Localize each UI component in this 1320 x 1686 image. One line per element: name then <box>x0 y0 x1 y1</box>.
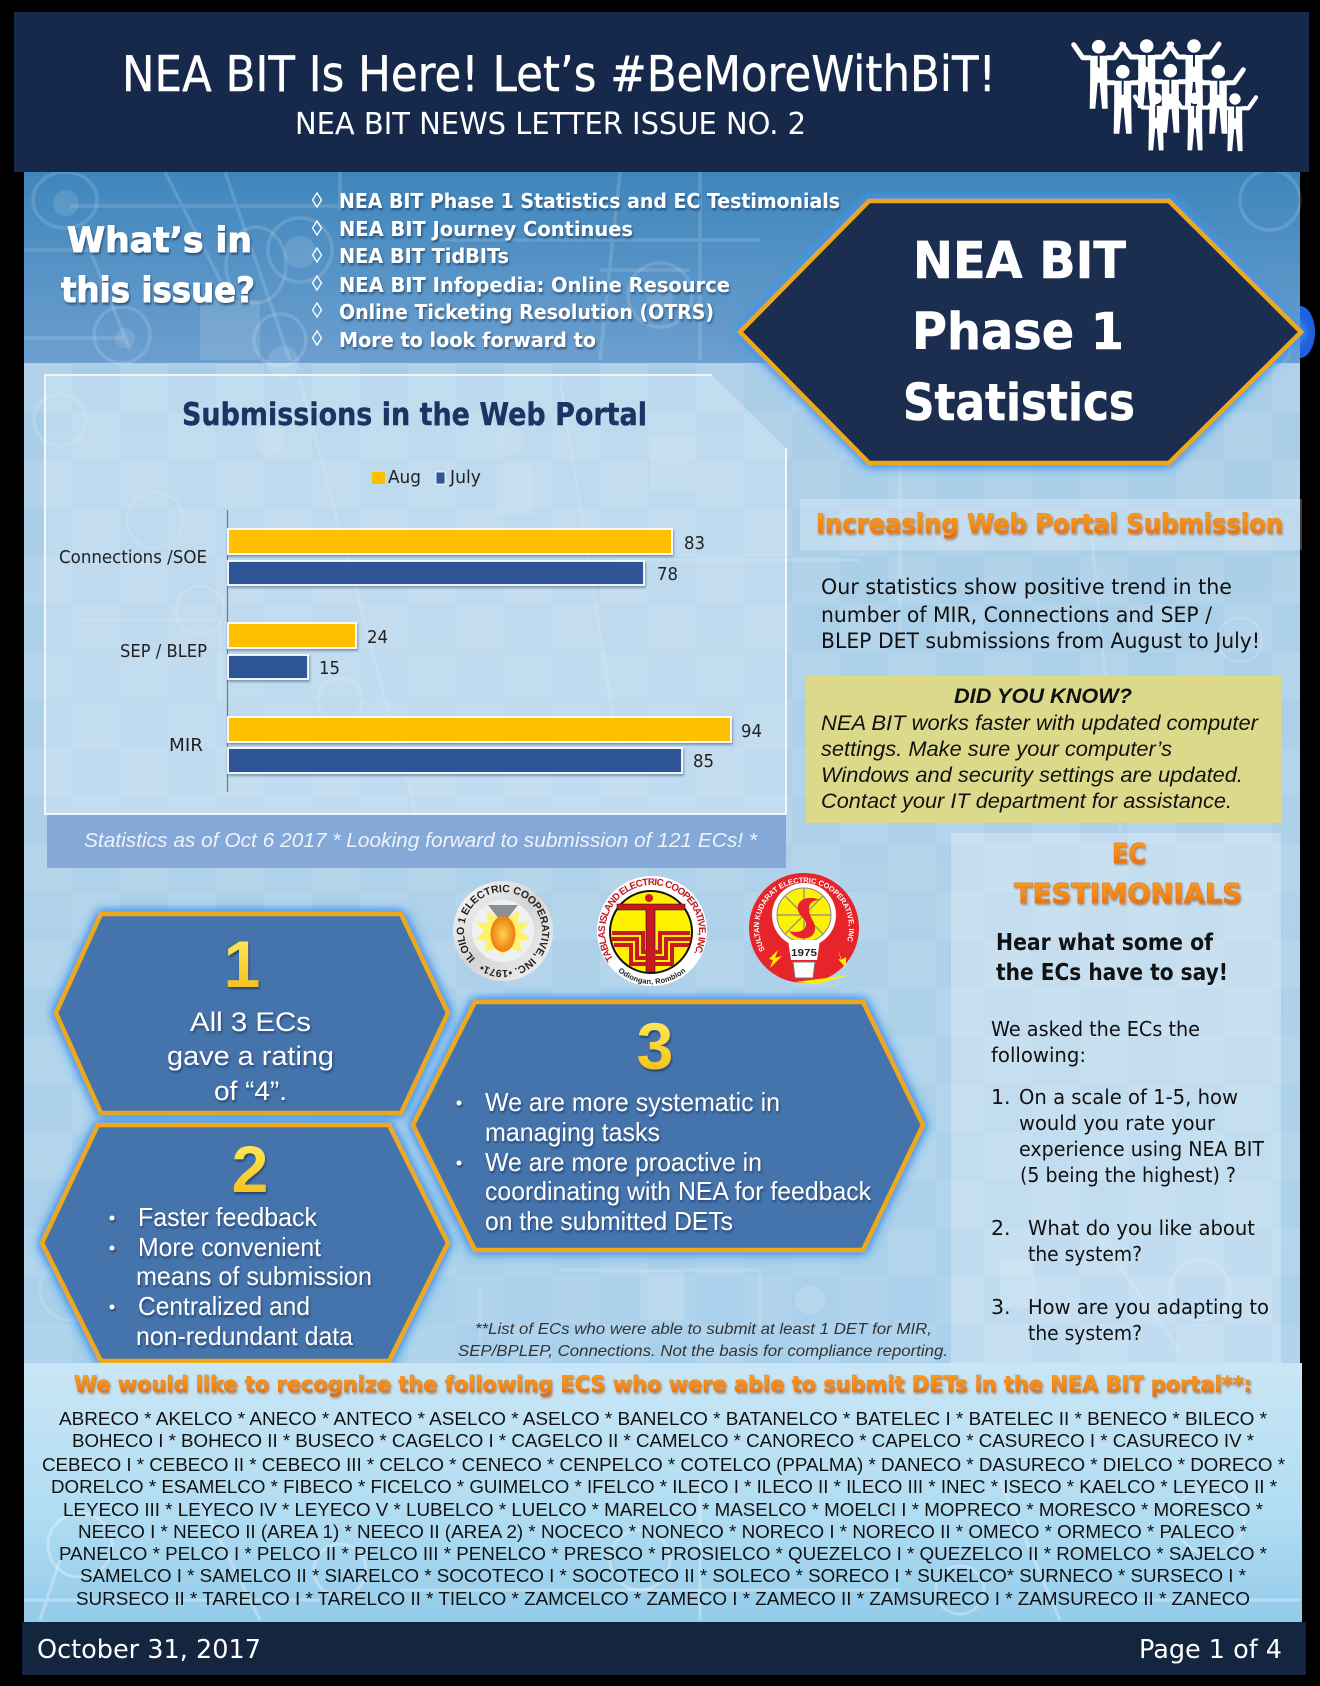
header banner <box>14 12 1309 172</box>
rating text: All 3 ECs <box>190 1007 311 1037</box>
EC names: SAMELCO I * SAMELCO II * SIARELCO * SOCOTECO I * SOCOTECO II * SOLECO * SORECO I * SUKELCO* SURNECO * SURSECO I * <box>80 1565 1246 1586</box>
testimonial questions: 3. <box>991 1295 1011 1319</box>
heading: What's in this issue: What’s in <box>67 221 252 261</box>
bar chart <box>59 510 762 792</box>
bar chart: 85 <box>693 751 714 772</box>
panel: answer 3 <box>413 1002 923 1250</box>
bar chart: Connections /SOE <box>59 547 207 568</box>
testimonials intro: Hear what some of <box>996 930 1214 956</box>
testimonial questions: would you rate your <box>1019 1111 1216 1135</box>
EC names: PANELCO * PELCO I * PELCO II * PELCO III * PENELCO * PRESCO * PROSIELCO * QUEZELCO I * QUEZELCO II * ROMELCO * SAJELCO * <box>59 1543 1267 1564</box>
chart legend <box>372 467 481 488</box>
issue contents list: More to look forward to <box>339 328 596 352</box>
rating text: gave a rating <box>167 1041 334 1071</box>
text: statistics summary: Our statistics show positive trend in the <box>821 575 1232 599</box>
icon: group of people <box>1074 39 1256 151</box>
likes list: More convenient <box>138 1232 322 1262</box>
issue contents list: NEA BIT TidBITs <box>339 244 509 268</box>
logo: Tablas Island Electric Cooperative: TABLAS ISLAND ELECTRIC COOPERATIVE, INC. <box>598 878 706 963</box>
adapting list: We are more systematic in <box>485 1087 780 1117</box>
badge: NEA BIT Phase 1 Statistics: Statistics <box>903 374 1135 433</box>
testimonial questions: experience using NEA BIT <box>1019 1137 1264 1161</box>
recognition heading: We would like to recognize the following ECS who were able to submit DETs in the NEA BIT portal**: <box>74 1373 1252 1398</box>
heading: increasing web portal submission <box>800 499 1302 550</box>
testimonial questions: What do you like about <box>1028 1216 1255 1240</box>
text: statistics summary <box>821 575 1260 653</box>
header subtitle: NEA BIT NEWS LETTER ISSUE NO. 2 <box>295 107 806 142</box>
EC names: ABRECO * AKELCO * ANECO * ANTECO * ASELCO * ASELCO * BANELCO * BATANELCO * BATELEC I * BATELEC II * BENECO * BILECO * <box>59 1408 1267 1429</box>
testimonial questions: How are you adapting to <box>1028 1295 1269 1319</box>
header title: NEA BIT Is Here! Let’s #BeMoreWithBiT! <box>122 46 996 103</box>
bar chart: 15 <box>319 658 340 679</box>
number 3: 3 <box>637 1009 673 1083</box>
footer bar <box>22 1622 1306 1675</box>
testimonial questions: 2. <box>991 1216 1011 1240</box>
likes list: Faster feedback <box>138 1202 318 1232</box>
logo: Sultan Kudarat Electric Cooperative: 1975 <box>791 948 818 959</box>
adapting list: managing tasks <box>485 1117 660 1147</box>
issue contents list <box>312 189 840 352</box>
chart title: Submissions in the Web Portal <box>182 397 647 433</box>
callout: did you know: DID YOU KNOW? <box>954 685 1132 708</box>
rating text <box>167 1007 334 1106</box>
footer page number: Page 1 of 4 <box>1139 1635 1282 1665</box>
issue contents list: NEA BIT Phase 1 Statistics and EC Testimonials <box>339 189 840 213</box>
text: statistics summary: BLEP DET submissions from August to July! <box>821 629 1260 653</box>
testimonials intro <box>996 930 1228 986</box>
footnote: SEP/BPLEP, Connections. Not the basis for compliance reporting. <box>458 1343 948 1360</box>
chart legend: Aug <box>388 467 421 488</box>
footer date: October 31, 2017 <box>37 1635 261 1665</box>
EC names: SURSECO II * TARELCO I * TARELCO II * TIELCO * ZAMCELCO * ZAMECO I * ZAMECO II * ZAMSURECO I * ZAMSURECO II * ZANECO <box>76 1588 1250 1609</box>
number 2: 2 <box>232 1132 268 1206</box>
EC names <box>42 1408 1285 1609</box>
text: statistics summary: number of MIR, Connections and SEP / <box>821 603 1213 627</box>
logo: Tablas Island Electric Cooperative: Odiongan, Romblon <box>619 968 686 986</box>
chart caption <box>47 815 786 868</box>
bar chart: 78 <box>657 564 678 585</box>
heading: What's in this issue <box>61 221 255 311</box>
bar chart: 24 <box>367 627 388 648</box>
footnote: **List of ECs who were able to submit at least 1 DET for MIR, <box>475 1321 932 1338</box>
issue contents list: Online Ticketing Resolution (OTRS) <box>339 300 714 324</box>
adapting list: We are more proactive in <box>485 1147 762 1177</box>
testimonial questions: We asked the ECs the <box>991 1017 1200 1041</box>
panel: EC testimonials <box>951 833 1281 1363</box>
testimonial questions: the system? <box>1028 1321 1142 1345</box>
heading: What's in this issue: this issue? <box>61 271 255 311</box>
number 1: 1 <box>224 927 260 1001</box>
callout: did you know <box>806 676 1281 823</box>
panel: submissions chart <box>45 375 786 814</box>
likes list: non-redundant data <box>136 1321 354 1351</box>
EC names: BOHECO I * BOHECO II * BUSECO * CAGELCO I * CAGELCO II * CAMELCO * CANORECO * CAPELCO * CASURECO I * CASURECO IV * <box>72 1430 1254 1451</box>
bar chart: MIR <box>169 735 203 756</box>
callout: did you know: settings. Make sure your computer’s <box>821 738 1173 761</box>
panel: answer 1 <box>56 914 448 1113</box>
adapting list: on the submitted DETs <box>485 1206 733 1236</box>
EC names: CEBECO I * CEBECO II * CEBECO III * CELCO * CENECO * CENPELCO * COTELCO (PPALMA) * DANECO * DASURECO * DIELCO * DORECO * <box>42 1454 1285 1475</box>
logo: Iloilo 1 Electric Cooperative: ILOILO 1 ELECTRIC COOPERATIVE, INC. •1971• <box>456 884 550 978</box>
badge: NEA BIT Phase 1 Statistics: Phase 1 <box>912 303 1124 362</box>
adapting list: coordinating with NEA for feedback <box>485 1176 872 1206</box>
callout: did you know: Contact your IT department for assistance. <box>821 790 1232 813</box>
panel: answer 2 <box>42 1125 448 1361</box>
chart legend: July <box>449 467 481 488</box>
footnote <box>458 1321 948 1360</box>
top band <box>24 170 1300 378</box>
panel: EC recognition list <box>24 1363 1302 1622</box>
callout: did you know: NEA BIT works faster with updated computer <box>821 712 1259 735</box>
likes list: means of submission <box>136 1261 372 1291</box>
testimonial questions: the system? <box>1028 1242 1142 1266</box>
bar chart: 94 <box>741 721 762 742</box>
likes list <box>110 1202 372 1351</box>
testimonials intro: the ECs have to say! <box>996 960 1228 986</box>
adapting list <box>456 1087 872 1236</box>
issue contents list: NEA BIT Infopedia: Online Resource <box>339 273 730 297</box>
rating text: of “4”. <box>214 1076 287 1106</box>
likes list: Centralized and <box>138 1291 310 1321</box>
chart caption: Statistics as of Oct 6 2017 * Looking forward to submission of 121 ECs! * <box>84 830 758 852</box>
badge: NEA BIT Phase 1 Statistics <box>740 201 1315 463</box>
bar chart: SEP / BLEP <box>120 641 207 662</box>
logo: Sultan Kudarat Electric Cooperative: SULTAN KUDARAT ELECTRIC COOPERATIVE, INC <box>754 877 854 952</box>
EC names: LEYECO III * LEYECO IV * LEYECO V * LUBELCO * LUELCO * MARELCO * MASELCO * MOELCI I * MOPRECO * MORESCO * MORESCO * <box>63 1499 1263 1520</box>
badge: NEA BIT Phase 1 Statistics: NEA BIT <box>913 232 1126 291</box>
issue contents list: NEA BIT Journey Continues <box>339 217 633 241</box>
testimonial questions: following: <box>991 1043 1086 1067</box>
testimonial questions: (5 being the highest) ? <box>1020 1163 1236 1187</box>
testimonials heading: TESTIMONIALS <box>1014 877 1242 910</box>
testimonial questions: 1. <box>991 1085 1011 1109</box>
callout: did you know: Windows and security settings are updated. <box>821 764 1243 787</box>
logo: Sultan Kudarat Electric Cooperative <box>749 873 859 984</box>
EC names: DORELCO * ESAMELCO * FIBECO * FICELCO * GUIMELCO * IFELCO * ILECO I * ILECO II * ILECO III * INEC * ISECO * KAELCO * LEYECO II * <box>51 1476 1277 1497</box>
EC names: NEECO I * NEECO II (AREA 1) * NEECO II (AREA 2) * NOCECO * NONECO * NORECO I * NORECO II * OMECO * ORMECO * PALECO * <box>78 1521 1247 1542</box>
testimonial questions <box>991 1017 1269 1345</box>
testimonial questions: On a scale of 1-5, how <box>1019 1085 1238 1109</box>
testimonials heading: EC <box>1112 837 1146 870</box>
bar chart: 83 <box>684 533 705 554</box>
testimonials heading <box>1014 837 1242 910</box>
